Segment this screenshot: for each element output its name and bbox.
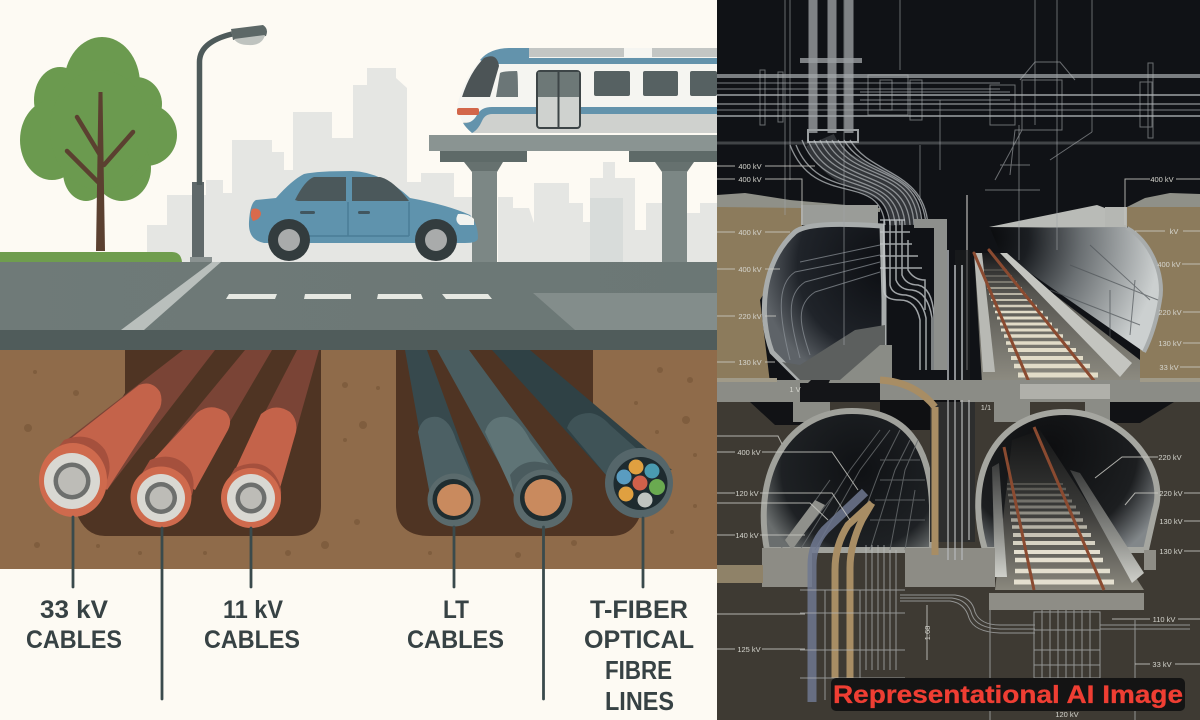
voltage labels: 33 kV	[1152, 660, 1172, 669]
voltage labels: 130 kV	[1158, 339, 1182, 348]
panel: tunnel cross-section blueprint	[717, 0, 1200, 720]
label: T-Fiber optical fibre lines: T-FIBER	[590, 596, 688, 624]
label: LT cables: CABLES	[407, 626, 504, 654]
voltage labels: 220 kV	[738, 312, 762, 321]
trench: low tension and fibre	[396, 350, 640, 536]
voltage labels: 33 kV	[1159, 363, 1179, 372]
slab between levels	[717, 378, 1200, 430]
voltage labels: 125 kV	[737, 645, 761, 654]
optical fibre cable	[492, 350, 673, 518]
vertical pipe risers	[800, 0, 862, 142]
voltage labels: 120 kV	[1055, 710, 1079, 719]
LT cable two	[437, 350, 572, 528]
lower track sleepers	[1007, 484, 1114, 582]
voltage labels: 1.68	[923, 626, 932, 640]
label leader lines lower	[717, 436, 1200, 664]
horizontal conduit bundle	[717, 62, 1200, 190]
voltage labels: 400 kV	[738, 265, 762, 274]
label leader lines upper	[717, 166, 1200, 367]
11 kV cable one	[130, 350, 272, 528]
city skyline right	[498, 162, 717, 262]
earth layers upper	[717, 193, 1200, 383]
voltage labels: 140 kV	[735, 531, 759, 540]
voltage labels: 120 kV	[735, 489, 759, 498]
voltage labels: 220 kV	[1158, 453, 1182, 462]
street lamp	[190, 25, 267, 262]
upper right tunnel	[974, 205, 1161, 383]
label: 33 kV cables	[26, 596, 122, 654]
voltage labels: 1 V	[789, 385, 801, 394]
soil speckles	[24, 367, 697, 558]
lower left tunnel	[764, 411, 932, 550]
voltage labels: 220 kV	[1158, 308, 1182, 317]
S-curve cable bundle	[790, 140, 928, 225]
voltage labels: 130 kV	[1159, 517, 1183, 526]
voltage labels: 400 kV	[738, 175, 762, 184]
lower conduit manifold	[900, 595, 1190, 720]
lower right tunnel	[978, 412, 1157, 590]
voltage labels	[735, 162, 1183, 719]
voltage labels: 130 kV	[1159, 547, 1183, 556]
label: T-Fiber optical fibre lines: FIBRE	[605, 655, 672, 685]
metro train	[457, 48, 717, 133]
thin vertical drafting lines	[785, 0, 1092, 345]
11 kV cable two	[221, 350, 319, 528]
voltage labels: 110 kV	[1153, 615, 1175, 624]
leader lines	[73, 517, 643, 699]
voltage labels: 400 kV	[737, 448, 761, 457]
central conduit stack	[880, 195, 970, 383]
lower concrete base	[717, 402, 1156, 610]
voltage labels: 1/1	[981, 403, 991, 412]
label: 11 kV cables: CABLES	[204, 626, 300, 654]
voltage labels: 130 kV	[738, 358, 762, 367]
voltage labels: kV	[1170, 227, 1178, 236]
tree	[20, 37, 177, 251]
panel: street and underground cables illustration	[0, 0, 717, 720]
voltage labels: 400 kV	[738, 228, 762, 237]
city skyline left	[147, 68, 472, 262]
elevated viaduct	[429, 135, 717, 263]
label: 33 kV cables: 33 kV	[40, 596, 108, 624]
label: T-Fiber optical fibre lines: OPTICAL	[584, 626, 694, 654]
label: 33 kV cables: CABLES	[26, 626, 122, 654]
road surface	[0, 262, 717, 350]
voltage labels: 400 kV	[1150, 175, 1174, 184]
33 kV cable	[39, 350, 215, 517]
label: T-Fiber optical fibre lines: LINES	[605, 686, 674, 716]
label: 11 kV cables	[204, 596, 300, 654]
label: T-Fiber optical fibre lines	[584, 596, 694, 716]
caption: Representational AI Image: Representational AI Image	[833, 681, 1183, 709]
car	[249, 171, 478, 261]
voltage labels: 400 kV	[1157, 260, 1181, 269]
voltage labels: 220 kV	[1159, 489, 1183, 498]
lower track rails	[1004, 427, 1104, 590]
label: 11 kV cables: 11 kV	[223, 596, 283, 624]
trench: power cables	[76, 350, 321, 536]
label: LT cables: LT	[443, 596, 469, 624]
voltage labels: 400 kV	[738, 162, 762, 171]
grass strip	[0, 252, 182, 262]
label: LT cables	[407, 596, 504, 654]
lower cable pipes	[800, 380, 969, 702]
soil layer	[0, 350, 717, 569]
upper left tunnel	[764, 205, 892, 380]
LT cable one	[405, 350, 480, 526]
